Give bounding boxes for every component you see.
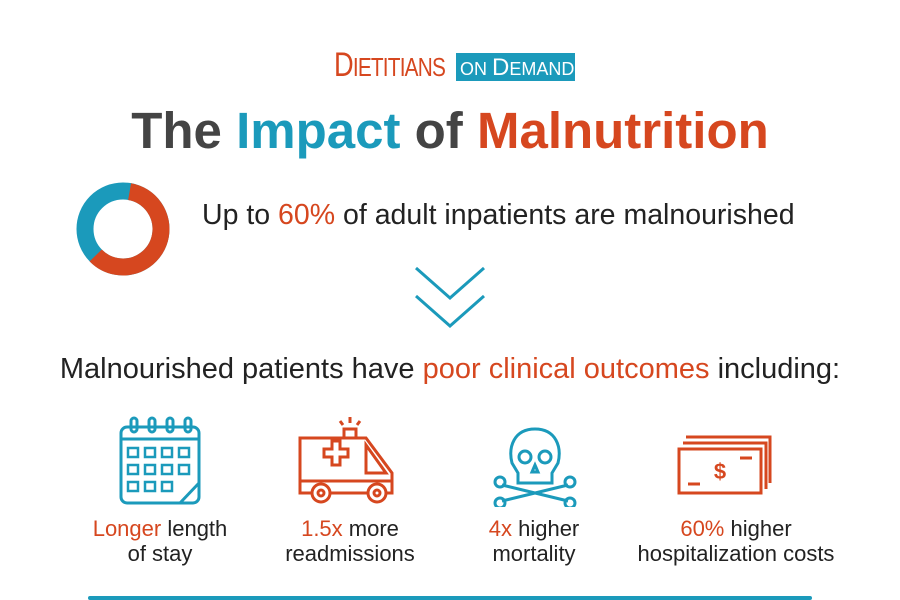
label: costs: 60% higher [680,516,792,541]
donut chart [76,182,170,276]
label: readmissions: readmissions [285,541,415,566]
logo: ON DEMAND [460,54,574,81]
label: mortality: mortality [492,541,576,566]
label: readmissions [285,516,415,566]
label: costs: hospitalization costs [638,541,834,566]
label: length of stay: of stay [128,541,192,566]
subheading: Malnourished patients have poor clinical outcomes including: [60,353,840,385]
label: mortality [489,516,579,566]
title: The Impact of Malnutrition [131,102,769,159]
label: mortality: 4x higher [489,516,579,541]
label: length of stay [93,516,227,566]
icon: skull and crossbones [494,428,576,507]
logo [334,46,575,84]
stat text: Up to 60% of adult inpatients are malnourished [202,199,795,231]
icon: ambulance [298,417,394,504]
logo: DIETITIANS [334,46,445,84]
label: length of stay: Longer length [93,516,227,541]
icon: calendar [120,416,200,504]
label: readmissions: 1.5x more [301,516,399,541]
arrow: chevrons [415,267,485,328]
icon: money [678,436,772,494]
label: costs [638,516,834,566]
icon: money: $ [714,459,726,484]
